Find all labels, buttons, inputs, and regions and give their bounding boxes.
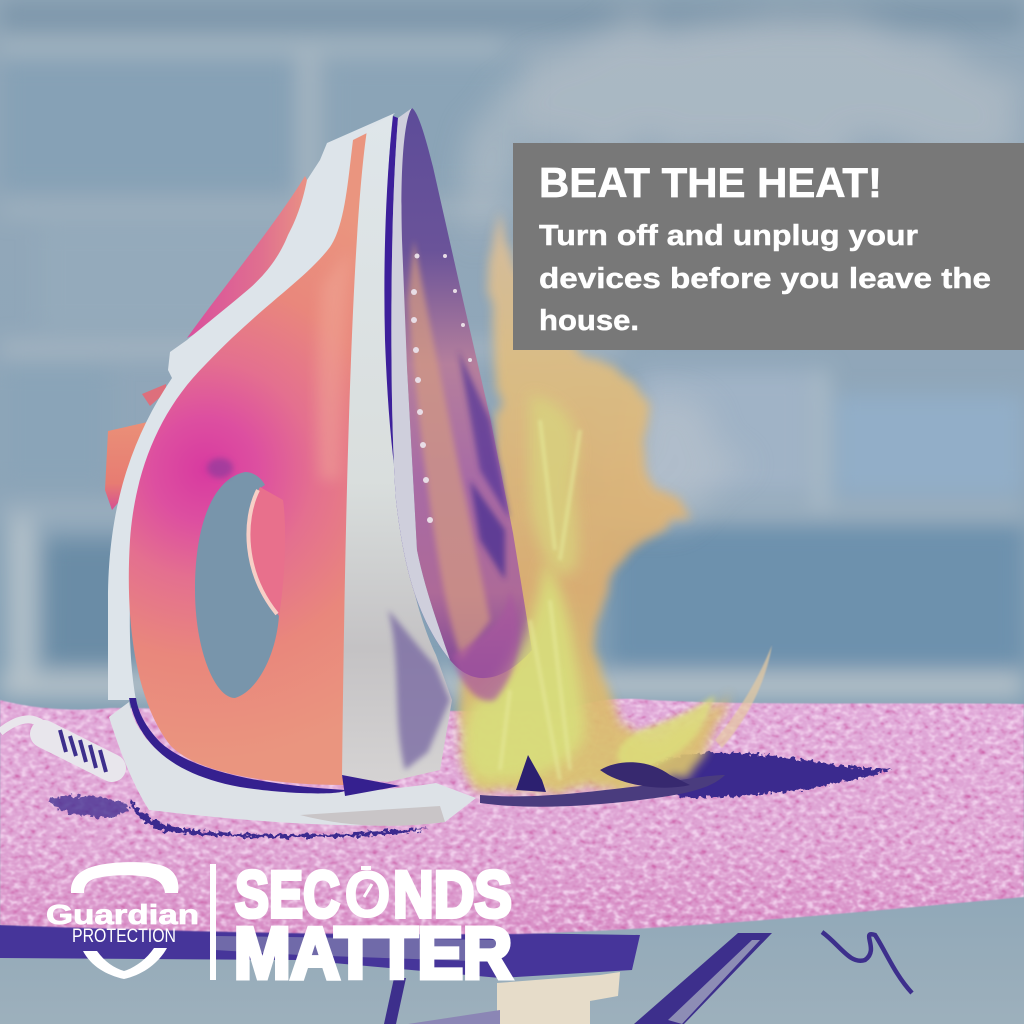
seconds wordmark: O <box>344 857 391 931</box>
temperature dial <box>250 487 285 616</box>
charred fabric under the soleplate <box>480 755 725 807</box>
wordmark: Guardian <box>46 899 199 930</box>
scorch marks on towel <box>48 752 893 838</box>
callout box <box>513 143 1024 350</box>
callout heading: BEAT THE HEAT! <box>539 159 882 206</box>
steam vents <box>411 254 472 523</box>
stopwatch hand <box>364 884 372 897</box>
pink-orange body <box>129 133 367 785</box>
board legs and cord <box>384 932 912 1024</box>
rear tab <box>105 421 152 510</box>
base of the iron <box>109 702 476 826</box>
flames in front <box>452 395 772 781</box>
soleplate <box>401 108 532 678</box>
dark seam <box>384 116 450 660</box>
Seconds Matter logo <box>234 857 512 994</box>
iron <box>105 108 725 826</box>
sub-wordmark: PROTECTION <box>72 926 176 947</box>
towel-covered ironing board <box>0 698 1024 978</box>
body highlight <box>317 250 350 480</box>
callout body text <box>539 220 991 337</box>
callout body text: house. <box>539 305 639 337</box>
power cord <box>0 719 112 772</box>
stopwatch crown <box>361 866 371 870</box>
matter wordmark: MATTER <box>234 914 512 994</box>
callout body text: devices before you leave the <box>539 263 991 295</box>
seconds wordmark: NDS <box>393 857 512 931</box>
white handle band <box>108 113 395 700</box>
smoke <box>450 10 1024 512</box>
board underside <box>0 925 640 978</box>
upper pink panel <box>187 176 312 338</box>
burn hole <box>650 752 893 797</box>
silver edge <box>391 108 450 660</box>
white side strip <box>342 114 452 782</box>
burn smear <box>388 610 450 770</box>
shield top <box>71 862 178 893</box>
seconds wordmark: SEC <box>235 857 340 931</box>
shield bottom <box>83 948 167 979</box>
logo divider <box>210 864 216 980</box>
dark smudge <box>207 458 233 478</box>
small red lever <box>142 384 166 406</box>
callout body text: Turn off and unplug your <box>539 220 918 252</box>
Guardian Protection logo <box>46 862 199 979</box>
hole through handle <box>195 472 279 698</box>
flames behind soleplate <box>462 205 725 793</box>
